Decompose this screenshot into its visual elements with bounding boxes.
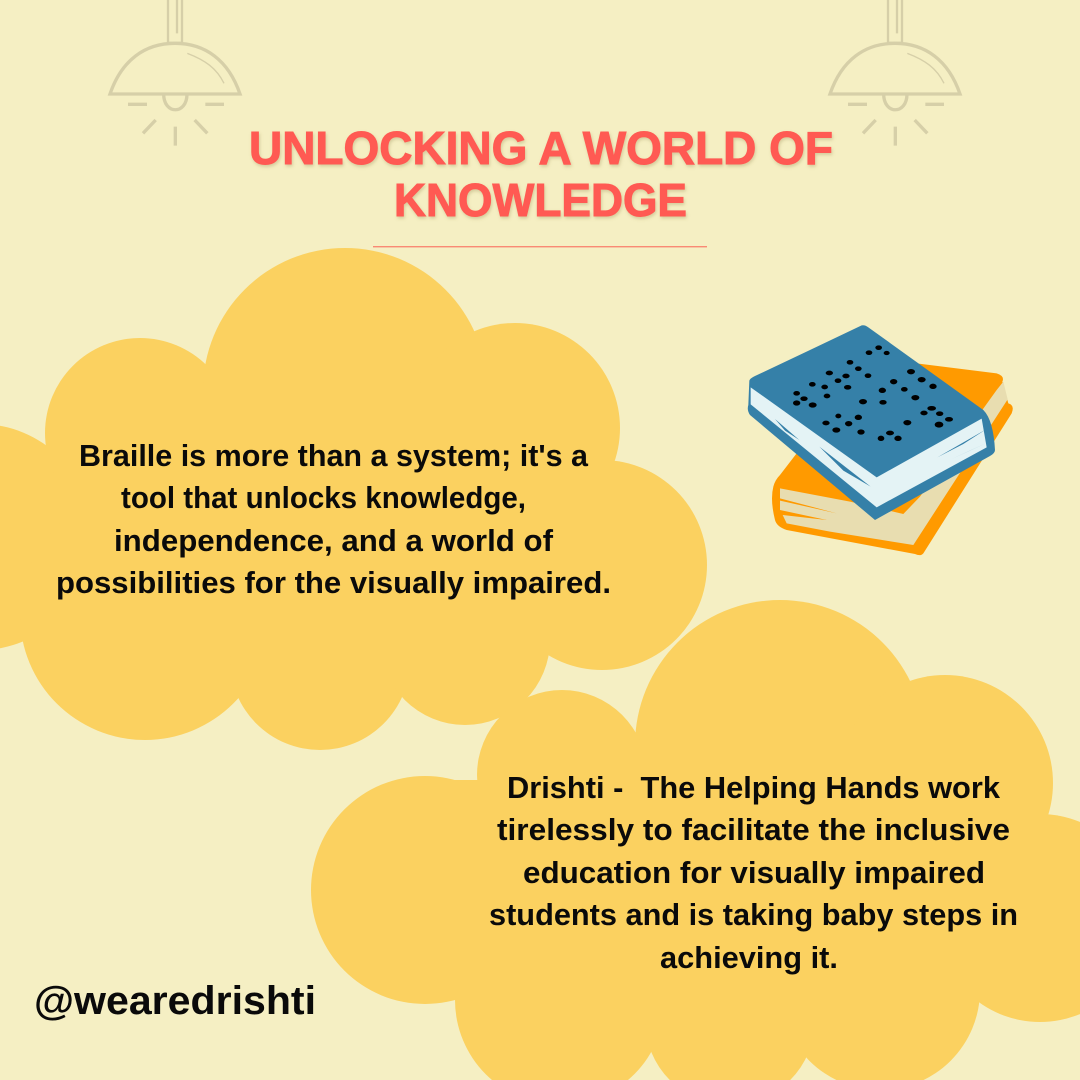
text block: Drishti description: tirelessly to facilitate the inclusive bbox=[497, 813, 1010, 847]
text block: Drishti description bbox=[489, 771, 1018, 975]
social handle: @wearedrishti bbox=[34, 979, 316, 1023]
text block: braille description: Braille is more than a system; it's a bbox=[79, 439, 589, 473]
blue upper book bbox=[748, 325, 995, 520]
cloud: lower right bbox=[311, 600, 1080, 1080]
title: UNLOCKING A WORLD OF bbox=[249, 122, 833, 174]
text block: braille description: independence, and a world of bbox=[114, 524, 554, 558]
orange lower book bbox=[772, 363, 1013, 555]
title: KNOWLEDGE bbox=[394, 174, 687, 226]
braille dots bbox=[793, 345, 953, 441]
text block: Drishti description: achieving it. bbox=[660, 941, 838, 975]
title divider bbox=[373, 246, 707, 247]
icon: stacked braille books bbox=[748, 325, 1013, 555]
text block: braille description: tool that unlocks knowledge, bbox=[121, 481, 526, 515]
text block: Drishti description: education for visually impaired bbox=[523, 856, 985, 890]
icon: ceiling lamp left bbox=[110, 0, 240, 146]
icon: ceiling lamp right bbox=[830, 0, 960, 146]
text block: Drishti description: Drishti - The Helping Hands work bbox=[507, 771, 1000, 805]
cloud: upper left bbox=[0, 248, 707, 750]
text block: braille description bbox=[56, 439, 611, 600]
title bbox=[249, 122, 833, 226]
text block: Drishti description: students and is taking baby steps in bbox=[489, 898, 1018, 932]
text block: braille description: possibilities for the visually impaired. bbox=[56, 566, 611, 600]
